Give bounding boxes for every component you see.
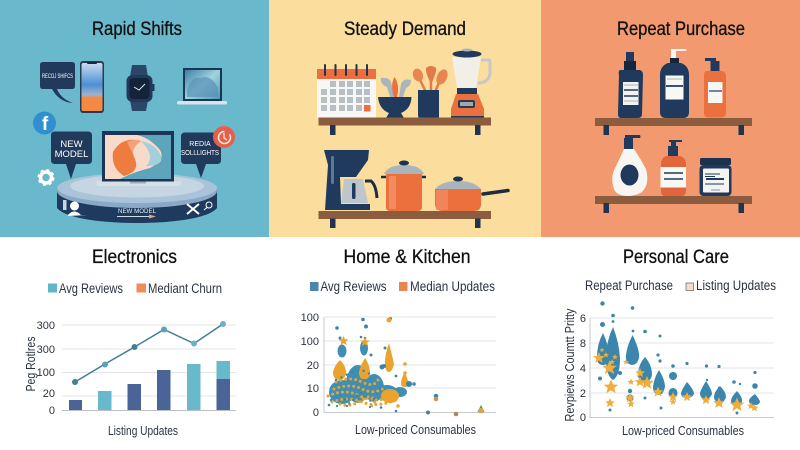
- legend: Median Updates: [410, 279, 495, 294]
- violin scatter: [593, 301, 760, 414]
- y axis labels: 8: [580, 338, 586, 350]
- y axis labels: 300: [37, 320, 55, 332]
- heading: home and kitchen: Home & Kitchen: [344, 247, 470, 268]
- icon: pump bottle: [660, 49, 689, 118]
- icon: spray bottle: [618, 52, 643, 118]
- y axis labels: 10: [307, 383, 319, 395]
- panel: steady demand: [269, 0, 541, 237]
- platform label: NEW MODEL: [118, 208, 156, 215]
- shelf: lower: [595, 196, 752, 213]
- y axis labels: 0: [49, 405, 55, 417]
- legend: [48, 281, 222, 296]
- y axis labels: [580, 313, 586, 424]
- x axis title: Listing Updates: [108, 424, 178, 438]
- line series: [72, 321, 226, 385]
- icon: gear: [38, 170, 54, 185]
- icon: cream jar: [700, 158, 732, 196]
- panel: personal care chart: [563, 247, 776, 438]
- heading: personal care: Personal Care: [623, 247, 729, 268]
- icon: phone: [80, 61, 104, 113]
- panel: rapid shifts: [0, 0, 269, 237]
- legend: Listing Updates: [696, 278, 776, 293]
- shelf: lower: [318, 211, 491, 228]
- y axis labels: 4: [580, 363, 586, 375]
- icon: small laptop: [177, 68, 227, 104]
- y axis labels: 20: [43, 388, 55, 400]
- legend: [310, 279, 495, 294]
- y axis labels: 0: [580, 412, 586, 424]
- bars: [69, 361, 230, 410]
- x axis title: Low-priced Consumables: [622, 424, 744, 438]
- heading: electronics: Electronics: [92, 247, 177, 268]
- speech bubble: shifts: RECOJ SHIFCS: [42, 74, 73, 80]
- y axis labels: 6: [580, 313, 586, 325]
- icon: blender: [451, 48, 490, 118]
- y axis labels: 100: [37, 367, 55, 379]
- icon: white lotion bottle: [612, 135, 647, 196]
- y axis title: Revpiews Coumtt Pritty: [563, 308, 577, 422]
- panel: home and kitchen chart: [301, 247, 496, 437]
- legend: Avg Reviews: [320, 279, 387, 294]
- speech bubble: new model: MODEL: [55, 149, 88, 160]
- legend: Repeat Purchase: [585, 278, 673, 293]
- legend: [585, 278, 776, 293]
- heading: rapid shifts: Rapid Shifts: [92, 19, 182, 40]
- speech bubble: media spotlights: REDIA: [189, 141, 211, 148]
- gridlines: [590, 318, 774, 393]
- panel: electronics chart: [24, 247, 236, 438]
- shelf: upper: [595, 118, 752, 135]
- speech bubble: new model: [51, 132, 92, 179]
- icon: saucepan: [435, 176, 508, 211]
- shelf: upper: [318, 118, 491, 135]
- y axis labels: [301, 312, 319, 419]
- legend: Avg Reviews: [59, 281, 123, 296]
- y axis labels: 0: [313, 407, 319, 419]
- icon: coffee maker: [324, 150, 377, 210]
- heading: steady demand: Steady Demand: [344, 19, 466, 40]
- legend: Mediant Churn: [148, 281, 222, 296]
- y axis labels: 20: [307, 360, 319, 372]
- icon: facebook: [33, 112, 56, 135]
- icon: calendar: [317, 65, 376, 118]
- platform: [57, 173, 217, 223]
- speech bubble: shifts: [40, 62, 75, 103]
- icon: stock pot: [381, 160, 426, 211]
- icon: bowl with utensils: [378, 77, 412, 118]
- icon: smartwatch: [126, 65, 154, 111]
- speech bubble: media spotlights: [181, 132, 221, 178]
- y axis labels: 2: [580, 388, 586, 400]
- icon: soap dispenser: [660, 140, 686, 196]
- icon: utensil crock: [411, 66, 450, 118]
- icon: clock badge: [213, 126, 235, 148]
- y axis labels: 100: [301, 312, 319, 324]
- y axis title: Peg Rotlres: [24, 336, 38, 392]
- speech bubble: new model: NEW: [60, 139, 83, 150]
- y axis labels: 300: [37, 344, 55, 356]
- icon: small pump bottle: [704, 58, 726, 118]
- heading: repeat purchase: Repeat Purchase: [617, 19, 745, 40]
- x axis title: Low-priced Consumables: [355, 423, 476, 437]
- icon: facebook: f: [42, 114, 49, 135]
- gridlines: [324, 317, 496, 388]
- speech bubble: media spotlights: SOLLLIGHTS: [181, 150, 219, 157]
- scatter plot: [328, 317, 484, 416]
- panel: repeat purchase: [541, 0, 800, 237]
- y axis labels: [37, 320, 55, 417]
- icon: central laptop: [96, 131, 182, 186]
- y axis labels: 100: [301, 336, 319, 348]
- gridlines and axis: [62, 325, 236, 396]
